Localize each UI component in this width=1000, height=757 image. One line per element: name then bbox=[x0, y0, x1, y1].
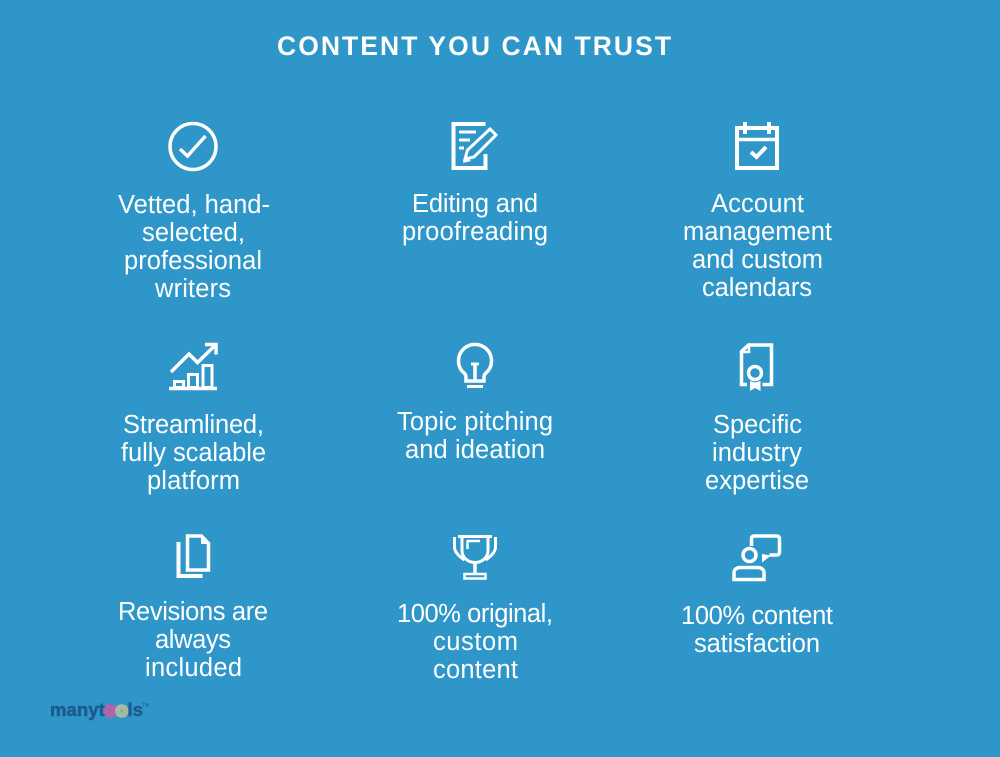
text: revisions: included bbox=[145, 654, 242, 682]
title: CONTENT YOU CAN TRUST bbox=[277, 31, 671, 61]
text: topic pitching: Topic pitching bbox=[397, 408, 553, 436]
text: topic pitching: and ideation bbox=[405, 436, 545, 464]
text: vetted writers: professional bbox=[124, 247, 262, 275]
text: vetted writers bbox=[118, 191, 270, 303]
text: account management: management bbox=[683, 218, 832, 246]
item: original content bbox=[397, 536, 553, 684]
text: platform: fully scalable bbox=[121, 439, 266, 467]
icon: stacked documents bbox=[178, 535, 210, 576]
text: vetted writers: selected, bbox=[142, 219, 245, 247]
item: account management bbox=[683, 122, 832, 302]
text: industry expertise: industry bbox=[712, 439, 802, 467]
text: industry expertise: expertise bbox=[705, 467, 809, 495]
text: original content: content bbox=[433, 656, 518, 684]
icon: person with speech bubble bbox=[734, 536, 780, 580]
text: editing bbox=[402, 190, 548, 246]
text: satisfaction bbox=[681, 602, 833, 658]
item: industry expertise bbox=[705, 344, 809, 495]
text: revisions: always bbox=[155, 626, 231, 654]
text: account management bbox=[683, 190, 832, 302]
text: original content: 100% original, bbox=[397, 600, 553, 628]
text: account management: Account bbox=[711, 190, 804, 218]
text: revisions bbox=[118, 598, 268, 682]
icon: check circle bbox=[170, 124, 216, 170]
text: industry expertise: Specific bbox=[713, 411, 802, 439]
text: topic pitching bbox=[397, 408, 553, 464]
text: vetted writers: Vetted, hand- bbox=[118, 191, 270, 219]
text: account management: calendars bbox=[702, 274, 812, 302]
text: account management: and custom bbox=[692, 246, 823, 274]
icon: calendar bbox=[736, 122, 778, 168]
text: revisions: Revisions are bbox=[118, 598, 268, 626]
item: revisions bbox=[118, 535, 268, 682]
text: editing: Editing and bbox=[412, 190, 538, 218]
icon: document and pencil bbox=[454, 124, 496, 168]
text: industry expertise bbox=[705, 411, 809, 495]
icon: certificate bbox=[741, 344, 772, 391]
icon: growth chart bbox=[169, 344, 217, 388]
icon: light bulb bbox=[459, 344, 492, 386]
item: satisfaction bbox=[681, 536, 833, 658]
item: topic pitching bbox=[397, 344, 553, 464]
text: satisfaction: 100% content bbox=[681, 602, 833, 630]
text: editing: proofreading bbox=[402, 218, 548, 246]
text: original content: custom bbox=[433, 628, 518, 656]
logo: manytools: TM bbox=[142, 703, 149, 709]
logo: manytools: manytools bbox=[50, 699, 143, 720]
text: platform bbox=[121, 411, 266, 495]
text: original content bbox=[397, 600, 553, 684]
item: editing bbox=[402, 124, 548, 246]
item: vetted writers bbox=[118, 124, 270, 303]
item: platform bbox=[121, 344, 266, 495]
text: satisfaction: satisfaction bbox=[694, 630, 820, 658]
icon: trophy bbox=[454, 536, 496, 578]
text: platform: platform bbox=[147, 467, 240, 495]
text: vetted writers: writers bbox=[154, 275, 231, 303]
text: platform: Streamlined, bbox=[123, 411, 264, 439]
